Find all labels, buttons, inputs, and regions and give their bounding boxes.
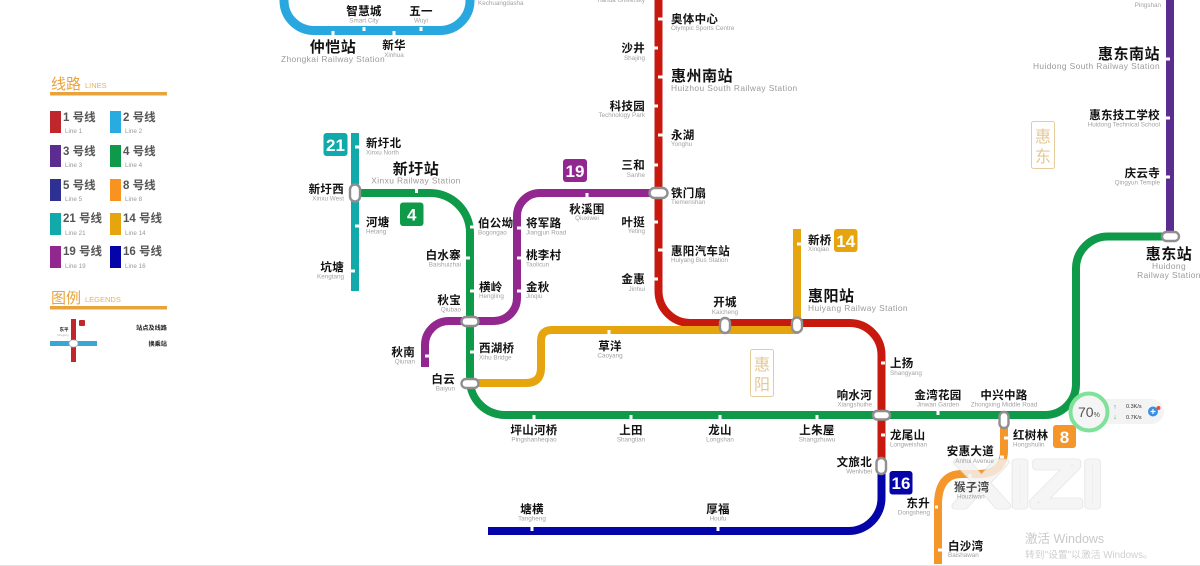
legend heading: lines: 线路 <box>51 76 81 93</box>
legend sample diagram <box>50 319 97 362</box>
station: Yeting <box>621 215 645 235</box>
station: Jinwan Garden: Jinwan Garden <box>917 402 960 408</box>
legend item: line 4 <box>110 144 156 169</box>
station: Baishawan: Baishawan <box>948 552 979 559</box>
station: Huiyang Bus Station <box>671 244 730 264</box>
station: Huiyang railway <box>808 287 908 313</box>
line badge 16 <box>890 471 912 494</box>
legend panel: lines <box>50 76 167 270</box>
station: Xinxu railway: Xinxu Railway Station <box>371 176 461 186</box>
line badge 8: 8 <box>1060 428 1069 447</box>
station: Kengtang: 坑塘 <box>320 260 344 274</box>
station: Qingyun Temple: 庆云寺 <box>1125 166 1160 180</box>
station: Houfu <box>706 502 730 522</box>
station: Shangyang: 上扬 <box>890 357 914 370</box>
station: Caoyang: Caoyang <box>597 352 623 360</box>
station: Zhongxing Middle Road: Zhongxing Middle Road <box>971 402 1038 408</box>
station: Tiemenshan: 铁门扇 <box>671 186 706 200</box>
station: Jinqiu: 金秋 <box>526 280 550 294</box>
station: Huizhou South <box>671 67 798 93</box>
station: Yonghu <box>671 128 695 148</box>
station: Zhihuicheng: Smart City <box>349 18 380 24</box>
legend item: line 8 <box>110 178 156 203</box>
line badge 21: 21 <box>326 136 345 155</box>
station: Houziwan: 猴子湾 <box>954 480 990 494</box>
legend text: station and line: 站点及线路 <box>136 324 168 332</box>
station: Xinxu railway: 新圩站 <box>393 160 439 178</box>
station: Shangyang: Shangyang <box>890 370 922 377</box>
station: Xinxu West: 新圩西 <box>309 182 344 196</box>
station: Zhihuicheng: 智慧城 <box>346 4 382 18</box>
station: Huidong Technical School: 惠东技工学校 <box>1089 108 1160 122</box>
station: Huidong Technical School <box>1088 108 1160 128</box>
station: Xinhua <box>382 38 406 59</box>
station: Zhongkai railway: 仲恺站 <box>310 39 356 56</box>
station: Bogongao: 伯公坳 <box>478 216 513 230</box>
district seal: Huiyang: 阳 <box>754 376 770 394</box>
legend item: line 19: Line 19 <box>65 263 86 270</box>
station: Huidong South <box>1033 45 1160 71</box>
station: Yeting: Yeting <box>628 228 645 235</box>
legend heading: lines <box>50 76 167 96</box>
station: Jiangjun Road: Jiangjun Road <box>526 230 567 236</box>
station: Pingshanheqiao: Pingshanheqiao <box>511 436 557 444</box>
station: Hongshulin <box>1013 428 1049 448</box>
station: Pingshan: Pingshan <box>1135 2 1161 9</box>
station: Xihu Bridge: Xihu Bridge <box>479 354 512 362</box>
station: Hengling: Hengling <box>479 293 504 300</box>
station: Qiunan <box>391 345 415 366</box>
overlay: network speed widget: 70% <box>1078 404 1100 420</box>
station: Qiunan: 秋南 <box>391 345 415 359</box>
station: Taolicun: Taolicun <box>526 262 550 268</box>
station: Anhui Avenue <box>947 444 994 465</box>
line badge 8 <box>1053 425 1076 448</box>
district seal: Huidong: 东 <box>1035 148 1051 166</box>
legend item: line 5: 5 号线 <box>63 178 96 192</box>
legend item: line 3 <box>50 144 96 169</box>
legend heading: lines: LINES <box>85 81 107 90</box>
station: Pingshanheqiao <box>510 423 558 444</box>
station: Xinxu West <box>309 182 344 202</box>
legend item: line 21: 21 号线 <box>63 211 102 225</box>
legend item: line 1: 1 号线 <box>63 110 96 124</box>
district seal: Huidong <box>1032 122 1054 168</box>
line 21 <box>351 133 359 291</box>
station: Xinhua: Xinhua <box>384 52 404 59</box>
station: Baishawan <box>948 539 984 559</box>
line badge 19 <box>563 159 587 182</box>
station: Xihu Bridge <box>479 341 515 362</box>
station: Shajing: 沙井 <box>621 41 645 55</box>
station: Houziwan <box>954 480 990 500</box>
station: Huidong South: Huidong South Railway Station <box>1033 61 1160 71</box>
station: Houfu: 厚福 <box>706 502 730 516</box>
station: Baishuizhai <box>426 248 461 268</box>
district seal: Huiyang <box>750 350 774 396</box>
station: Yonghu: 永湖 <box>671 128 695 142</box>
station: Sanhe: Sanhe <box>627 172 645 179</box>
station: Hetang <box>366 215 390 236</box>
station: Jinwan Garden: 金湾花园 <box>914 388 962 402</box>
station: Hengling <box>479 280 504 300</box>
line 8 <box>935 420 1008 564</box>
station: Xinxu North <box>366 136 402 156</box>
station: Olympic Sports Centre <box>671 12 735 32</box>
station: Qiuxiwei: 秋溪围 <box>569 202 605 216</box>
legend sample diagram: Dongping <box>57 333 69 337</box>
station: Huidong railway: 惠东站 <box>1146 245 1192 263</box>
station: Wenlvbei: Wenlvbei <box>846 468 872 476</box>
legend item: line 14 <box>110 211 162 237</box>
line 16 <box>488 465 882 531</box>
legend item: line 14: 14 号线 <box>123 211 162 225</box>
legend item: line 2 <box>110 110 156 135</box>
overlay: network speed widget: ↑ <box>1113 404 1117 411</box>
legend item: line 2: 2 号线 <box>123 110 156 124</box>
legend item: line 21 <box>50 211 102 237</box>
station: Shajing <box>621 41 645 62</box>
station: Xinhua: 新华 <box>382 38 406 52</box>
station: Zhongxing Middle Road: 中兴中路 <box>980 388 1028 402</box>
station: Houziwan: Houziwan <box>957 494 985 500</box>
line badge 19: 19 <box>566 162 584 181</box>
station: Qiubao: Qiubao <box>441 306 461 314</box>
legend text: interchange: 换乘站 <box>148 340 167 348</box>
line badge 14 <box>834 229 858 252</box>
station: Huidong railway: Huidong <box>1152 261 1186 271</box>
station: Tangheng: 塘横 <box>520 502 544 516</box>
station: Baiyun: 白云 <box>431 372 455 386</box>
station: Longshan: Longshan <box>706 436 734 444</box>
station: Xinqiao: 新桥 <box>808 233 832 247</box>
overlay: Windows activation notice: 激活 Windows <box>1025 532 1104 546</box>
station: Longshan: 龙山 <box>708 423 732 437</box>
station: Xiangshuihe: 响水河 <box>837 388 872 402</box>
station: Huidong railway <box>1137 245 1200 280</box>
station: Hetang: 河塘 <box>366 215 390 229</box>
station: Qiubao <box>437 293 461 314</box>
legend item: line 16: Line 16 <box>125 263 146 270</box>
line badge 16: 16 <box>892 474 910 493</box>
station: Xinqiao <box>808 233 832 253</box>
line 19 <box>425 193 658 367</box>
station: Bogongao: Bogongao <box>478 230 507 236</box>
station: Wuyi <box>409 6 433 24</box>
station: Kengtang: Kengtang <box>317 274 344 280</box>
station: Qiubao: 秋宝 <box>437 293 461 307</box>
station: Kaicheng: Kaicheng <box>712 309 739 316</box>
legend item: line 8: Line 8 <box>125 196 143 203</box>
station: Jiangjun Road: 将军路 <box>526 216 562 230</box>
station: Shangyang <box>890 357 922 377</box>
station: Caoyang <box>597 339 623 360</box>
legend item: line 3: 3 号线 <box>63 144 96 158</box>
line badge 4 <box>400 202 424 226</box>
legend item: line 16 <box>110 244 162 270</box>
station: Baishuizhai: 白水寨 <box>426 248 461 262</box>
station: Shangtian: Shangtian <box>617 436 646 444</box>
line badge 4: 4 <box>407 206 417 224</box>
line 14 <box>470 229 801 383</box>
station: Huiyang railway: 惠阳站 <box>808 287 855 305</box>
station: Hongshulin: 红树林 <box>1013 428 1049 442</box>
station: Qiuxiwei: Qiuxiwei <box>575 215 599 222</box>
overlay: network speed widget: 0.7K/s <box>1126 415 1142 421</box>
station: Xiangshuihe: Xiangshuihe <box>837 402 872 408</box>
station: Zhongxing Middle Road <box>971 388 1038 408</box>
line 3 <box>1166 0 1170 236</box>
station: Tangheng <box>518 502 546 522</box>
station: Kaicheng: 开城 <box>713 295 737 309</box>
station: Qiunan: Qiunan <box>395 358 415 366</box>
overlay: network speed widget <box>1070 394 1164 430</box>
station: Jinwan Garden <box>914 388 962 408</box>
overlay: Windows activation notice <box>1025 532 1153 561</box>
station: Dongsheng: Dongsheng <box>898 510 930 516</box>
station: Zhongkai railway: Zhongkai Railway Station <box>281 54 385 64</box>
station: Xinxu North: 新圩北 <box>366 136 402 150</box>
legend item: line 5 <box>50 178 96 203</box>
station: Technology Park: Technology Park <box>598 112 646 119</box>
station: Technology Park <box>598 99 646 119</box>
station: Xiangshuihe <box>837 388 872 408</box>
station: Huiyang Bus Station: 惠阳汽车站 <box>671 244 730 258</box>
legend item: line 14: Line 14 <box>125 230 146 237</box>
legend item: line 19: 19 号线 <box>63 244 102 258</box>
station: Tiemenshan <box>671 186 706 206</box>
station: Qiuxiwei <box>569 202 605 222</box>
station: Zhihuicheng <box>346 4 382 24</box>
legend item: line 16: 16 号线 <box>123 244 162 258</box>
line badge 21 <box>324 133 348 156</box>
station: Huiyang Bus Station: Huiyang Bus Station <box>671 257 729 264</box>
station: Kechuang: Kechuangdasha <box>478 0 524 7</box>
station: Olympic Sports Centre: 奥体中心 <box>671 12 718 26</box>
watermark: XIZI: XIZI <box>954 448 1104 520</box>
station: Hetang: Hetang <box>366 228 387 236</box>
legend item: line 1 <box>50 110 96 135</box>
station: Xinxu railway <box>371 160 461 186</box>
station: Baiyun: Baiyun <box>436 386 455 392</box>
station: Huizhou South: Huizhou South Railway Station <box>671 83 798 93</box>
legend item: line 8: 8 号线 <box>123 178 156 192</box>
station: Shangzhuwu: Shangzhuwu <box>799 436 836 444</box>
station: Houfu: Houfu <box>710 516 727 522</box>
station: Zhongkai railway <box>281 39 385 64</box>
station: Tiemenshan: Tiemenshan <box>671 199 706 206</box>
station: Taolicun <box>526 248 562 268</box>
watermark: XIZI: XIZI <box>954 448 1104 520</box>
station: Jiangjun Road <box>526 216 567 236</box>
station: Yeting: 叶挺 <box>621 215 645 229</box>
legend item: line 3: Line 3 <box>65 162 83 169</box>
legend item: line 19 <box>50 244 102 270</box>
station: Longweishan <box>890 428 928 448</box>
station: Wuyi: 五一 <box>409 6 433 18</box>
station: Jinhui: 金惠 <box>621 272 645 286</box>
station: Xinxu North: Xinxu North <box>366 150 399 156</box>
legend heading: legends <box>50 290 167 310</box>
station: Taolicun: 桃李村 <box>526 248 562 262</box>
station: Huiyang railway: Huiyang Railway Station <box>808 303 908 313</box>
station: Kengtang <box>317 260 344 280</box>
station: Olympic Sports Centre: Olympic Sports Centre <box>671 25 735 32</box>
station: Bogongao <box>478 216 513 236</box>
station: Yonghu: Yonghu <box>671 141 693 148</box>
legend item: line 21: Line 21 <box>65 230 86 237</box>
line 2 <box>284 0 470 35</box>
station: Xinqiao: Xinqiao <box>808 246 830 253</box>
station: Wenlvbei: 文旅北 <box>837 455 872 469</box>
station: Wuyi: Wuyi <box>414 18 428 24</box>
station: Longweishan: 龙尾山 <box>890 428 925 442</box>
station: Qingyun Temple: Qingyun Temple <box>1115 180 1160 186</box>
station: Sanhe: 三和 <box>621 158 645 172</box>
station: Longshan <box>706 423 734 444</box>
station: Jinqiu <box>526 280 550 300</box>
station labels <box>281 0 1200 559</box>
overlay: network speed widget: ↓ <box>1113 414 1117 421</box>
station: Pingshanheqiao: 坪山河桥 <box>510 423 558 437</box>
legend heading: legends: LEGENDS <box>85 295 121 304</box>
district seal: Huiyang: 惠 <box>754 356 770 374</box>
overlay: Windows activation notice: 转到"设置"以激活 Windows。 <box>1025 548 1153 561</box>
station: Anhui Avenue: 安惠大道 <box>947 444 994 458</box>
station: Shangzhuwu: 上朱屋 <box>799 423 835 437</box>
station: Caoyang: 草洋 <box>598 339 622 353</box>
station: Qingyun Temple <box>1115 166 1160 186</box>
legend sample diagram: 东平 <box>60 326 69 333</box>
station: Baishawan: 白沙湾 <box>948 539 984 553</box>
legend panel: symbols <box>50 290 168 362</box>
station: Technology Park: 科技园 <box>610 99 645 113</box>
station: Dongsheng: 东升 <box>906 496 930 510</box>
station: Shangtian <box>617 424 646 444</box>
district seal: Huidong: 惠 <box>1035 128 1051 146</box>
line 1 <box>653 0 885 465</box>
legend item: line 5: Line 5 <box>65 196 83 203</box>
station: Wenlvbei <box>837 455 872 476</box>
station: Huidong South: 惠东南站 <box>1098 45 1160 63</box>
line 4 <box>355 189 1170 419</box>
station: Huidong railway: Railway Station <box>1137 270 1200 280</box>
station: Shangzhuwu <box>799 423 836 444</box>
line badge 14: 14 <box>836 232 856 251</box>
station: Xinxu West: Xinxu West <box>312 196 344 202</box>
station: Jinhui <box>621 272 645 293</box>
station: Longweishan: Longweishan <box>890 442 928 448</box>
station: Baiyun <box>431 372 455 392</box>
station: Jinhui: Jinhui <box>629 286 645 293</box>
legend item: line 1: Line 1 <box>65 128 83 135</box>
legend item: line 2: Line 2 <box>125 128 143 135</box>
station: Dongsheng <box>898 496 930 516</box>
station: Tangheng: Tangheng <box>518 516 546 522</box>
station: Shangtian: 上田 <box>619 424 643 437</box>
legend item: line 4: 4 号线 <box>123 144 156 158</box>
station: Sanhe <box>621 158 645 179</box>
station: Xihu Bridge: 西湖桥 <box>479 341 515 355</box>
station: Huizhou South: 惠州南站 <box>671 67 733 85</box>
legend heading: legends: 图例 <box>51 290 81 307</box>
station: Huidong Technical School: Huidong Technical School <box>1088 122 1160 128</box>
station: Shajing: Shajing <box>624 55 645 62</box>
station: Kaicheng <box>712 295 739 316</box>
station: Baishuizhai: Baishuizhai <box>429 262 461 268</box>
overlay: network speed widget: 0.3K/s <box>1126 404 1142 410</box>
legend item: line 4: Line 4 <box>125 162 143 169</box>
interchange stations <box>350 184 1179 474</box>
station: Anhui Avenue: Anhui Avenue <box>955 458 994 465</box>
station: Hongshulin: Hongshulin <box>1013 442 1045 448</box>
station: Hengling: 横岭 <box>479 280 503 294</box>
station: Jinqiu: Jinqiu <box>526 293 543 300</box>
